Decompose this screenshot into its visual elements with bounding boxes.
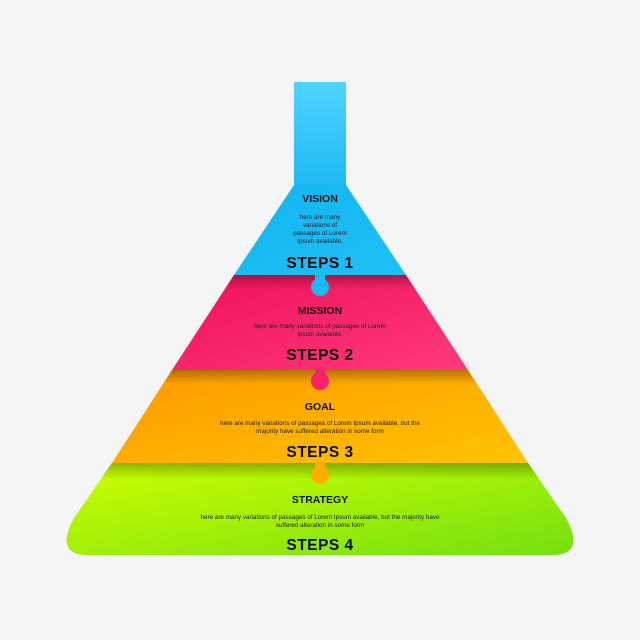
text: vision body: variations of bbox=[303, 222, 337, 229]
text: goal body: here are many variations of passages of Lorem Ipsum available, but the bbox=[220, 420, 420, 427]
label: steps 2: STEPS 2 bbox=[286, 347, 354, 364]
stem bbox=[294, 82, 346, 190]
layer 3: goal bbox=[112, 369, 528, 463]
heading: vision: VISION bbox=[302, 193, 338, 205]
layer 2: mission bbox=[172, 274, 468, 370]
text: mission body: here are many variations of passages of Lorem bbox=[254, 323, 386, 330]
text: goal body: majority have suffered alteration in some form bbox=[256, 428, 384, 435]
text: vision body: Ipsum available, bbox=[297, 238, 343, 245]
text: strategy body: suffered alteration in some form bbox=[276, 522, 364, 529]
knob: orange bbox=[311, 462, 329, 484]
text: vision body: here are many bbox=[300, 214, 341, 221]
heading: strategy: STRATEGY bbox=[292, 494, 348, 506]
text: strategy body: here are many variations of passages of Lorem Ipsum available, but the majority have bbox=[200, 514, 440, 521]
knob: pink bbox=[311, 369, 329, 390]
label: steps 4: STEPS 4 bbox=[286, 537, 354, 554]
heading: goal: GOAL bbox=[305, 401, 336, 413]
heading: mission: MISSION bbox=[298, 305, 342, 317]
text: mission body: Ipsum available, bbox=[297, 331, 343, 338]
label: steps 3: STEPS 3 bbox=[286, 444, 354, 461]
text: vision body: passages of Lorem bbox=[293, 230, 347, 237]
label: steps 1: STEPS 1 bbox=[286, 255, 354, 272]
layer 4: strategy bbox=[40, 462, 600, 555]
layer 1: vision bbox=[234, 185, 406, 275]
knob: blue bbox=[311, 274, 329, 296]
